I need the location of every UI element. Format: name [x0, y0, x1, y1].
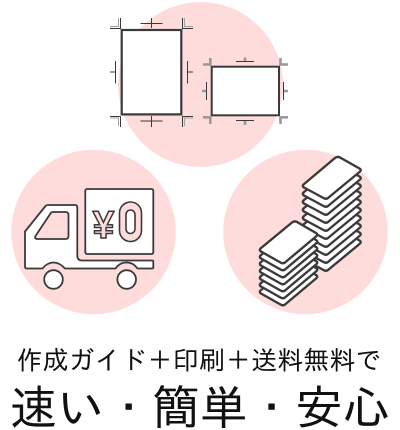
subheading: 作成ガイド＋印刷＋送料無料で	[16, 346, 382, 376]
panel: printed stacks circle	[223, 150, 388, 314]
icon: crop marks for landscape sheet	[202, 58, 288, 125]
icon: short stack of prints	[260, 221, 317, 305]
panel: print guide circle	[110, 2, 288, 167]
icon: crop marks for portrait sheet	[110, 18, 193, 127]
icon: portrait sheet	[122, 30, 181, 114]
icon: tall stack of prints	[303, 157, 361, 271]
icon: rear wheel	[117, 270, 136, 289]
icon: landscape sheet	[212, 67, 279, 115]
icon: front wheel	[44, 270, 63, 289]
icon: zero digit	[120, 202, 142, 242]
icon: truck cab and bed	[25, 205, 153, 268]
icon: yen symbol: ¥	[93, 204, 115, 247]
panel: free shipping circle	[11, 150, 176, 314]
icon: truck cargo box	[85, 189, 153, 254]
icon: truck window	[35, 212, 68, 239]
